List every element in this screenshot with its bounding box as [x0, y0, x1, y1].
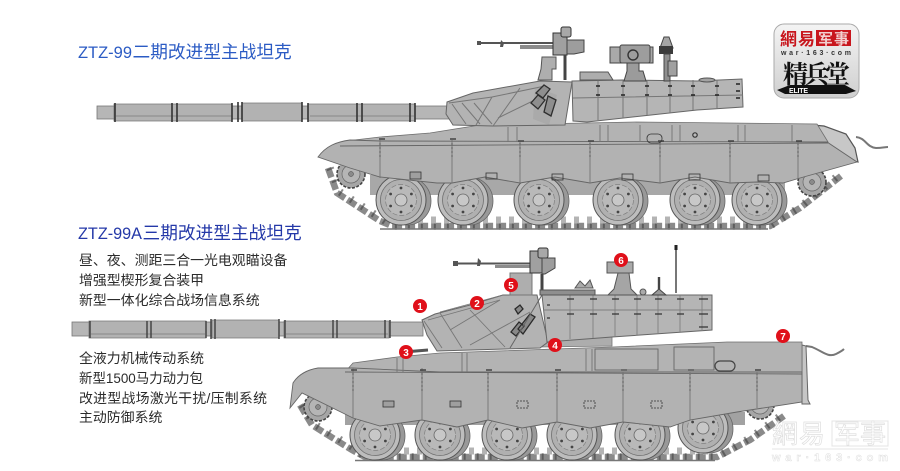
marker 2	[470, 296, 484, 310]
tank: ZTZ-99A phase three side view	[72, 245, 844, 460]
marker 3	[399, 345, 413, 359]
turret bottom armour	[437, 333, 612, 350]
rear hull edge	[802, 345, 810, 404]
feature list: turret: 增强型楔形复合装甲	[79, 272, 204, 288]
feature list: hull: 全液力机械传动系统	[79, 350, 204, 366]
marker 1	[413, 299, 427, 313]
feature list: hull: 主动防御系统	[79, 409, 162, 425]
hull seam details	[345, 347, 802, 422]
road wheels of lower tank	[350, 403, 733, 460]
logo: NetEase military elite badge: 精兵堂	[783, 55, 850, 91]
rear tow cable	[856, 137, 888, 148]
turret front wedge	[422, 295, 548, 351]
marker 1: 1	[417, 302, 423, 313]
title: ZTZ-99 phase two: ZTZ-99	[78, 43, 132, 62]
numbered markers	[399, 253, 790, 359]
watermark	[771, 419, 888, 464]
tank: ZTZ-99 phase two side view	[97, 27, 888, 229]
marker 4	[548, 338, 562, 352]
watermark: war·163·com	[771, 452, 888, 464]
turret armour box	[542, 295, 712, 342]
title: ZTZ-99A phase three: 三期改进型主战坦克	[142, 223, 302, 243]
side skirts	[290, 368, 802, 428]
watermark: 網易	[772, 419, 825, 449]
hull seam details	[340, 125, 828, 183]
lower hull between wheels	[345, 412, 745, 425]
title: ZTZ-99 phase two: 二期改进型主战坦克	[132, 42, 292, 62]
marker 5	[504, 278, 518, 292]
turret front wedge	[446, 81, 572, 126]
hull upper band	[345, 342, 802, 372]
logo: NetEase military elite badge: war·163·com	[780, 50, 851, 57]
lower hull between wheels	[370, 175, 785, 195]
sprockets of upper tank	[337, 160, 826, 196]
turret roof equipment	[477, 27, 715, 82]
title: ZTZ-99A phase three: ZTZ-99A	[78, 224, 143, 243]
marker 4: 4	[552, 341, 558, 352]
hull hatch marks	[383, 401, 662, 408]
logo: NetEase military elite badge: 军事	[818, 30, 849, 48]
marker 6	[614, 253, 628, 267]
main gun	[97, 102, 449, 122]
hull upper band	[340, 122, 828, 146]
feature list: turret: 昼、夜、测距三合一光电观瞄设备	[79, 252, 287, 268]
side skirts	[318, 140, 857, 183]
main gun	[72, 319, 423, 339]
road wheels of upper tank	[376, 175, 787, 225]
watermark: 军事	[834, 419, 886, 449]
turret armour box	[572, 79, 743, 122]
feature list: hull: 改进型战场激光干扰/压制系统	[79, 390, 267, 406]
turret roof equipment	[453, 245, 676, 295]
marker 6: 6	[618, 256, 624, 267]
hull hatch marks	[410, 133, 769, 181]
sprockets of lower tank	[304, 391, 774, 421]
logo: NetEase military elite badge: ELITE	[789, 88, 808, 95]
track of upper tank	[328, 168, 841, 229]
feature list: hull	[79, 350, 267, 425]
rear tow cable	[806, 346, 844, 355]
marker 2: 2	[474, 299, 480, 310]
logo: NetEase military elite badge	[774, 24, 859, 98]
track of lower tank	[300, 405, 784, 460]
feature list: turret: 新型一体化综合战场信息系统	[79, 292, 260, 308]
feature list: turret	[79, 252, 287, 308]
rear stowage	[812, 125, 858, 162]
logo: NetEase military elite badge: 網易	[780, 30, 815, 49]
feature list: hull: 新型1500马力动力包	[79, 370, 203, 386]
marker 5: 5	[508, 281, 514, 292]
marker 7: 7	[780, 332, 786, 343]
marker 3: 3	[403, 348, 409, 359]
marker 7	[776, 329, 790, 343]
